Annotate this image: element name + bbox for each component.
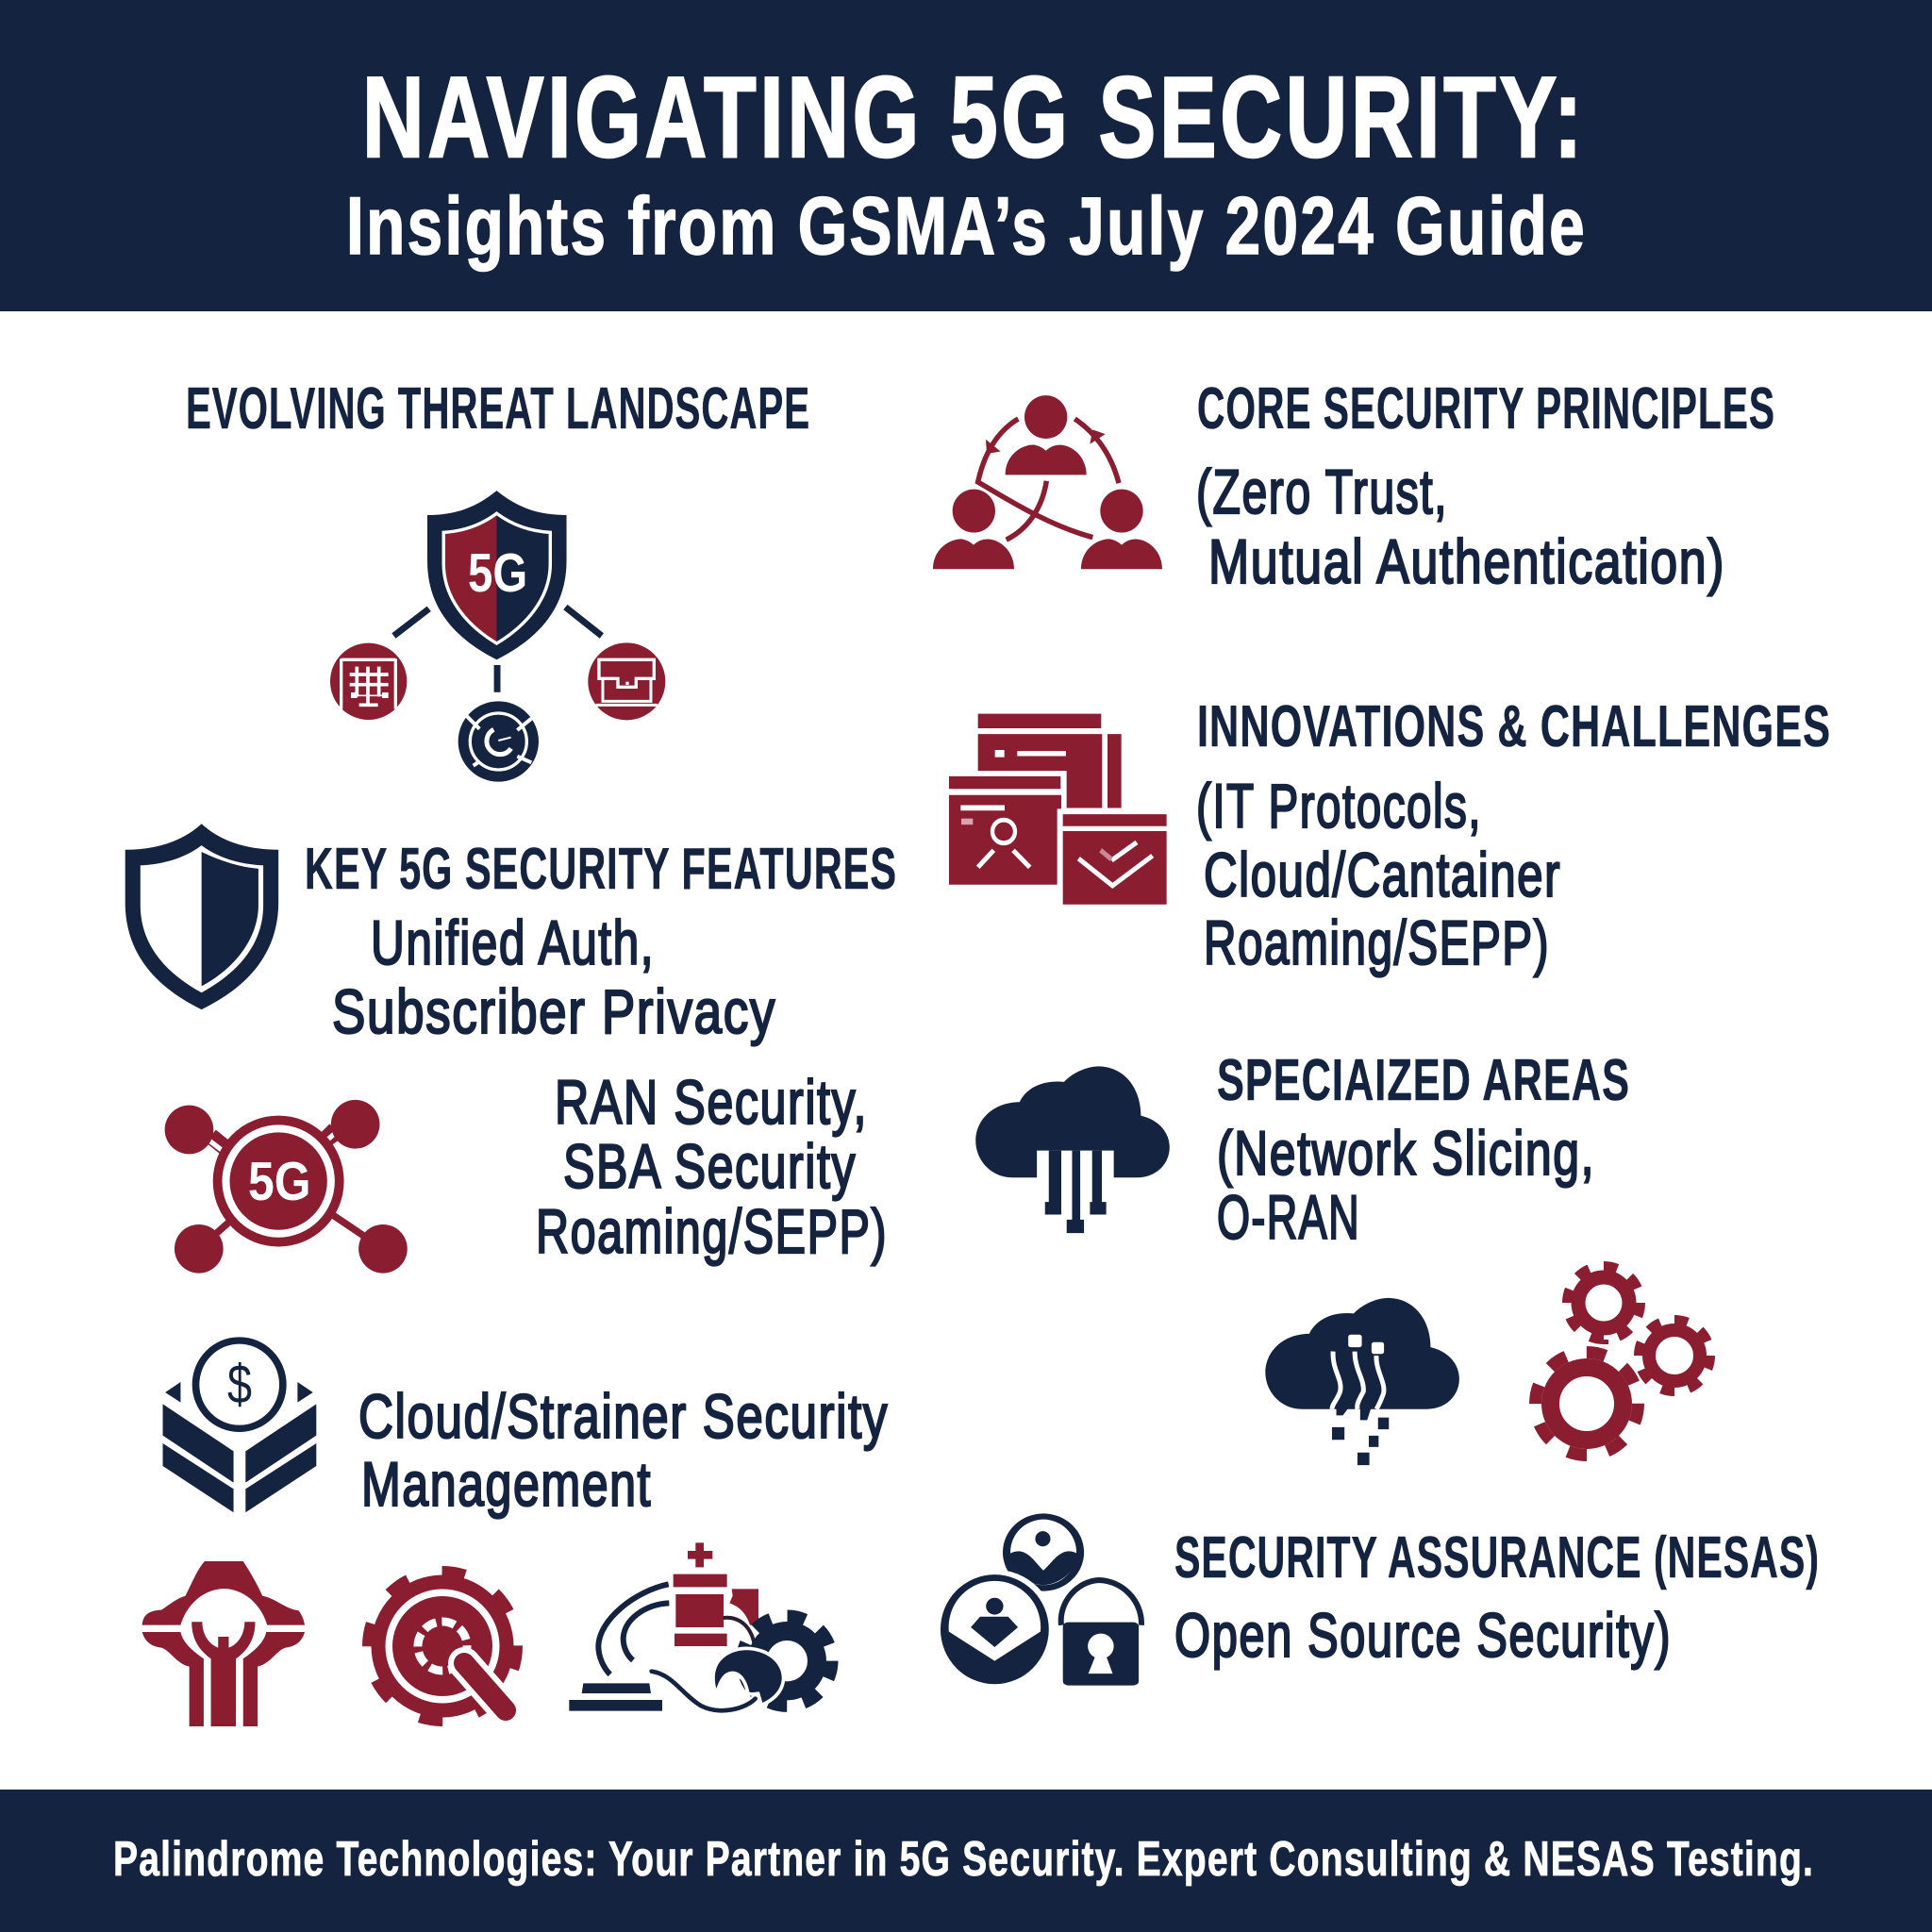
feature text: unified auth and subscriber privacy: Subscriber Privacy xyxy=(332,976,776,1046)
text: network slicing, O-RAN: O-RAN xyxy=(1217,1182,1360,1252)
text: protocols, cloud, roaming: (IT Protocols, xyxy=(1196,771,1482,841)
text: zero trust, mutual authentication xyxy=(1196,457,1725,596)
text: cloud security management: Management xyxy=(361,1449,652,1519)
panel: key 5G security features xyxy=(125,824,897,1046)
heading: key 5G security features: KEY 5G SECURITY FEATURES xyxy=(305,837,897,902)
icon: stacked windows xyxy=(949,714,1167,905)
icon: cloud with data streams xyxy=(1265,1298,1459,1465)
text: network slicing, O-RAN: (Network Slicing, xyxy=(1217,1118,1595,1188)
panel: security assurance xyxy=(934,1513,1820,1690)
icon: red connector hub xyxy=(142,1561,305,1726)
icon: people badges and padlock xyxy=(934,1513,1141,1690)
panel: specialized areas xyxy=(975,1048,1710,1465)
panel: cloud security management xyxy=(163,1337,889,1519)
heading: specialized areas: SPECIAIZED AREAS xyxy=(1217,1048,1630,1113)
text: protocols, cloud, roaming: Roaming/SEPP) xyxy=(1204,908,1550,977)
icon: 5G shield xyxy=(393,491,602,692)
icon: coin over layered chevrons xyxy=(163,1337,316,1512)
panel: evolving threat landscape xyxy=(186,376,810,782)
icon row: security tools xyxy=(142,1542,831,1726)
feature text: unified auth and subscriber privacy: Unified Auth, xyxy=(371,908,655,977)
icon glyph: dollar sign: $ xyxy=(227,1354,252,1415)
text: open source security: Open Source Security) xyxy=(1174,1600,1672,1670)
subtitle: Insights from GSMA’s July 2024 Guide xyxy=(346,181,1587,272)
icon: half shield xyxy=(125,824,278,1009)
panel: RAN and SBA security xyxy=(165,1067,888,1274)
header banner xyxy=(0,0,1932,311)
icon: 5G network hub: 5G xyxy=(248,1152,311,1212)
text: RAN, SBA, roaming: Roaming/SEPP) xyxy=(536,1196,888,1266)
text: zero trust, mutual authentication: Mutual Authentication) xyxy=(1208,526,1725,596)
text: RAN, SBA, roaming xyxy=(536,1067,888,1266)
text: RAN, SBA, roaming: SBA Security xyxy=(563,1131,857,1201)
icon: instrument with gear and wrench xyxy=(569,1542,831,1711)
icon: three red gears xyxy=(1536,1266,1710,1455)
footer banner xyxy=(0,1790,1932,1932)
heading: evolving threat landscape: EVOLVING THREAT LANDSCAPE xyxy=(186,376,810,441)
text: cloud security management: Cloud/Strainer Security xyxy=(358,1381,889,1451)
panel: innovations and challenges xyxy=(949,694,1831,977)
icon: cloud with connectors xyxy=(975,1066,1170,1233)
text: cloud security management xyxy=(358,1381,889,1519)
icon: three people in a cycle xyxy=(933,395,1162,569)
icon: threat nodes xyxy=(330,642,665,782)
text: zero trust, mutual authentication: (Zero Trust, xyxy=(1196,457,1448,526)
text: RAN, SBA, roaming: RAN Security, xyxy=(555,1067,868,1137)
text: network slicing, O-RAN xyxy=(1217,1118,1595,1252)
icon: 5G shield: 5G xyxy=(468,543,527,604)
text: protocols, cloud, roaming xyxy=(1196,771,1561,977)
feature text: unified auth and subscriber privacy xyxy=(332,908,776,1046)
panel: core security principles xyxy=(933,376,1775,596)
icon: gear with magnifier xyxy=(367,1571,518,1722)
icon: 5G network hub xyxy=(165,1100,408,1274)
text: protocols, cloud, roaming: Cloud/Cantainer xyxy=(1204,840,1561,909)
